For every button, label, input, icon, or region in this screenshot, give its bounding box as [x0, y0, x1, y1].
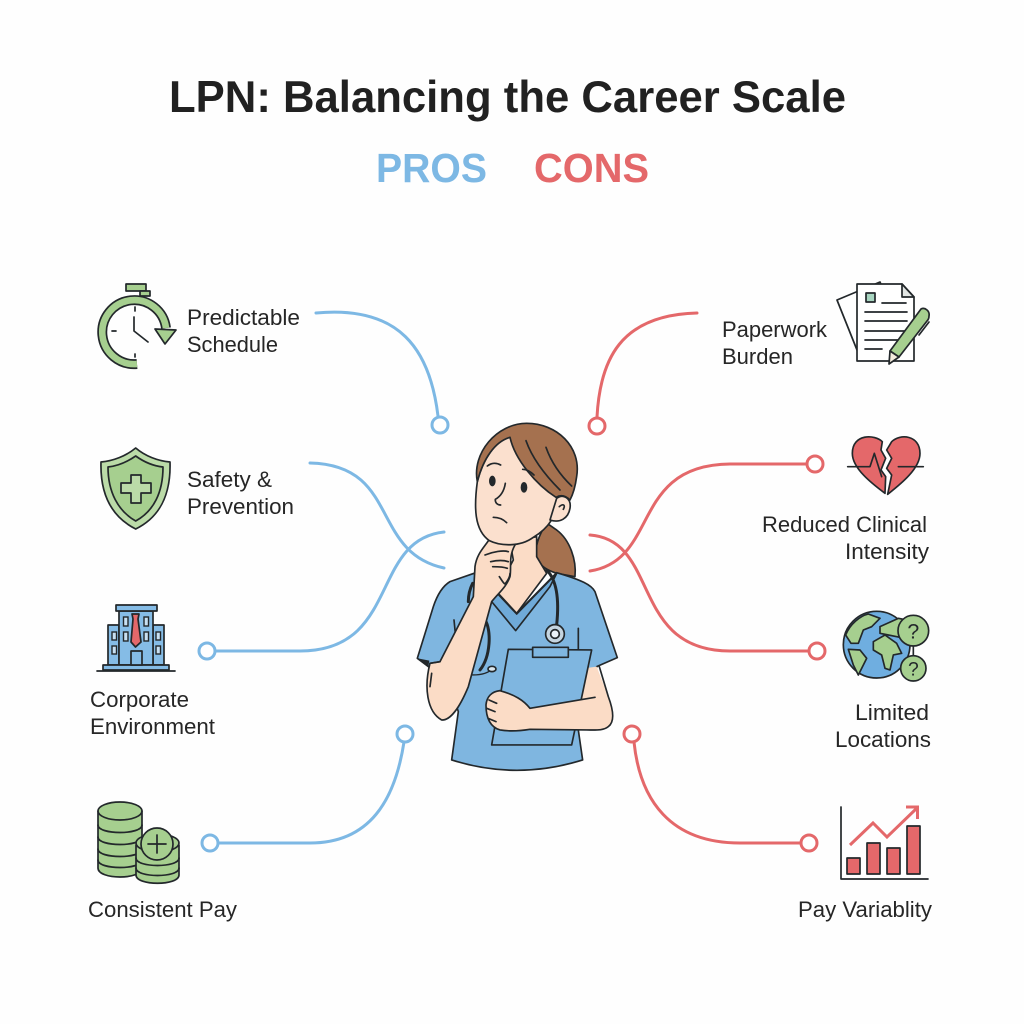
label: Pay Variablity	[798, 897, 932, 922]
con: limited locations	[835, 611, 931, 752]
con: paperwork burden	[722, 282, 929, 369]
label: Limited	[855, 700, 929, 725]
heading: pros: PROS	[376, 145, 487, 191]
icon: documents and pen	[837, 282, 929, 364]
icon: coin stacks	[98, 802, 179, 883]
icon: globe with question marks	[843, 611, 929, 681]
neck	[497, 537, 547, 613]
label: Reduced Clinical	[762, 512, 927, 537]
illustration: thinking nurse with clipboard	[417, 423, 617, 770]
label: Predictable	[187, 305, 300, 330]
stethoscope	[468, 570, 558, 675]
connector: safety and prevention	[310, 463, 444, 568]
pro: corporate environment: Environment	[90, 714, 215, 739]
connector: reduced clinical intensity	[590, 456, 823, 571]
connector: limited locations	[590, 535, 825, 659]
con: reduced clinical intensity	[762, 437, 929, 564]
label: Paperwork	[722, 317, 828, 342]
con: pay variability	[798, 807, 932, 922]
collar	[492, 573, 557, 631]
con: reduced clinical intensity: Intensity	[845, 539, 929, 564]
icon: shield with cross	[101, 448, 170, 529]
connector: paperwork burden	[589, 313, 697, 434]
raised arm and hand	[427, 538, 515, 720]
icon: globe with question marks: ?	[908, 659, 919, 680]
sleeve inner lines	[454, 620, 578, 650]
clipboard	[492, 649, 592, 745]
pro: safety and prevention: Prevention	[187, 494, 294, 519]
pro: predictable schedule: Schedule	[187, 332, 278, 357]
con: paperwork burden: Burden	[722, 344, 793, 369]
con: limited locations: Locations	[835, 727, 931, 752]
arm holding clipboard	[486, 690, 613, 731]
scrubs top	[417, 573, 617, 770]
head and face	[476, 437, 557, 545]
pro: corporate environment	[90, 605, 215, 739]
icon: stopwatch	[102, 284, 176, 364]
eyes brows nose mouth	[489, 476, 496, 486]
icon: globe with question marks: ?	[907, 619, 919, 643]
label: Consistent Pay	[88, 897, 237, 922]
ponytail	[536, 523, 575, 577]
hair	[477, 423, 577, 500]
right upper arm skin behind clipboard	[520, 667, 608, 730]
icon: bar chart with rising arrow	[841, 807, 928, 879]
label: Safety &	[187, 467, 272, 492]
title: LPN: Balancing the Career Scale	[169, 73, 846, 122]
label: Corporate	[90, 687, 189, 712]
connector: consistent pay	[202, 726, 413, 851]
pro: predictable schedule	[102, 284, 300, 364]
icon: broken heart with pulse	[848, 437, 923, 494]
connector: pay variability	[624, 726, 817, 851]
connector: predictable schedule	[316, 312, 448, 433]
ear	[550, 496, 570, 521]
heading: cons: CONS	[534, 145, 649, 191]
connector: corporate environment	[199, 532, 444, 659]
icon: office building with tie	[97, 605, 175, 671]
pro: safety and prevention	[101, 448, 294, 529]
pro: consistent pay	[88, 802, 237, 922]
